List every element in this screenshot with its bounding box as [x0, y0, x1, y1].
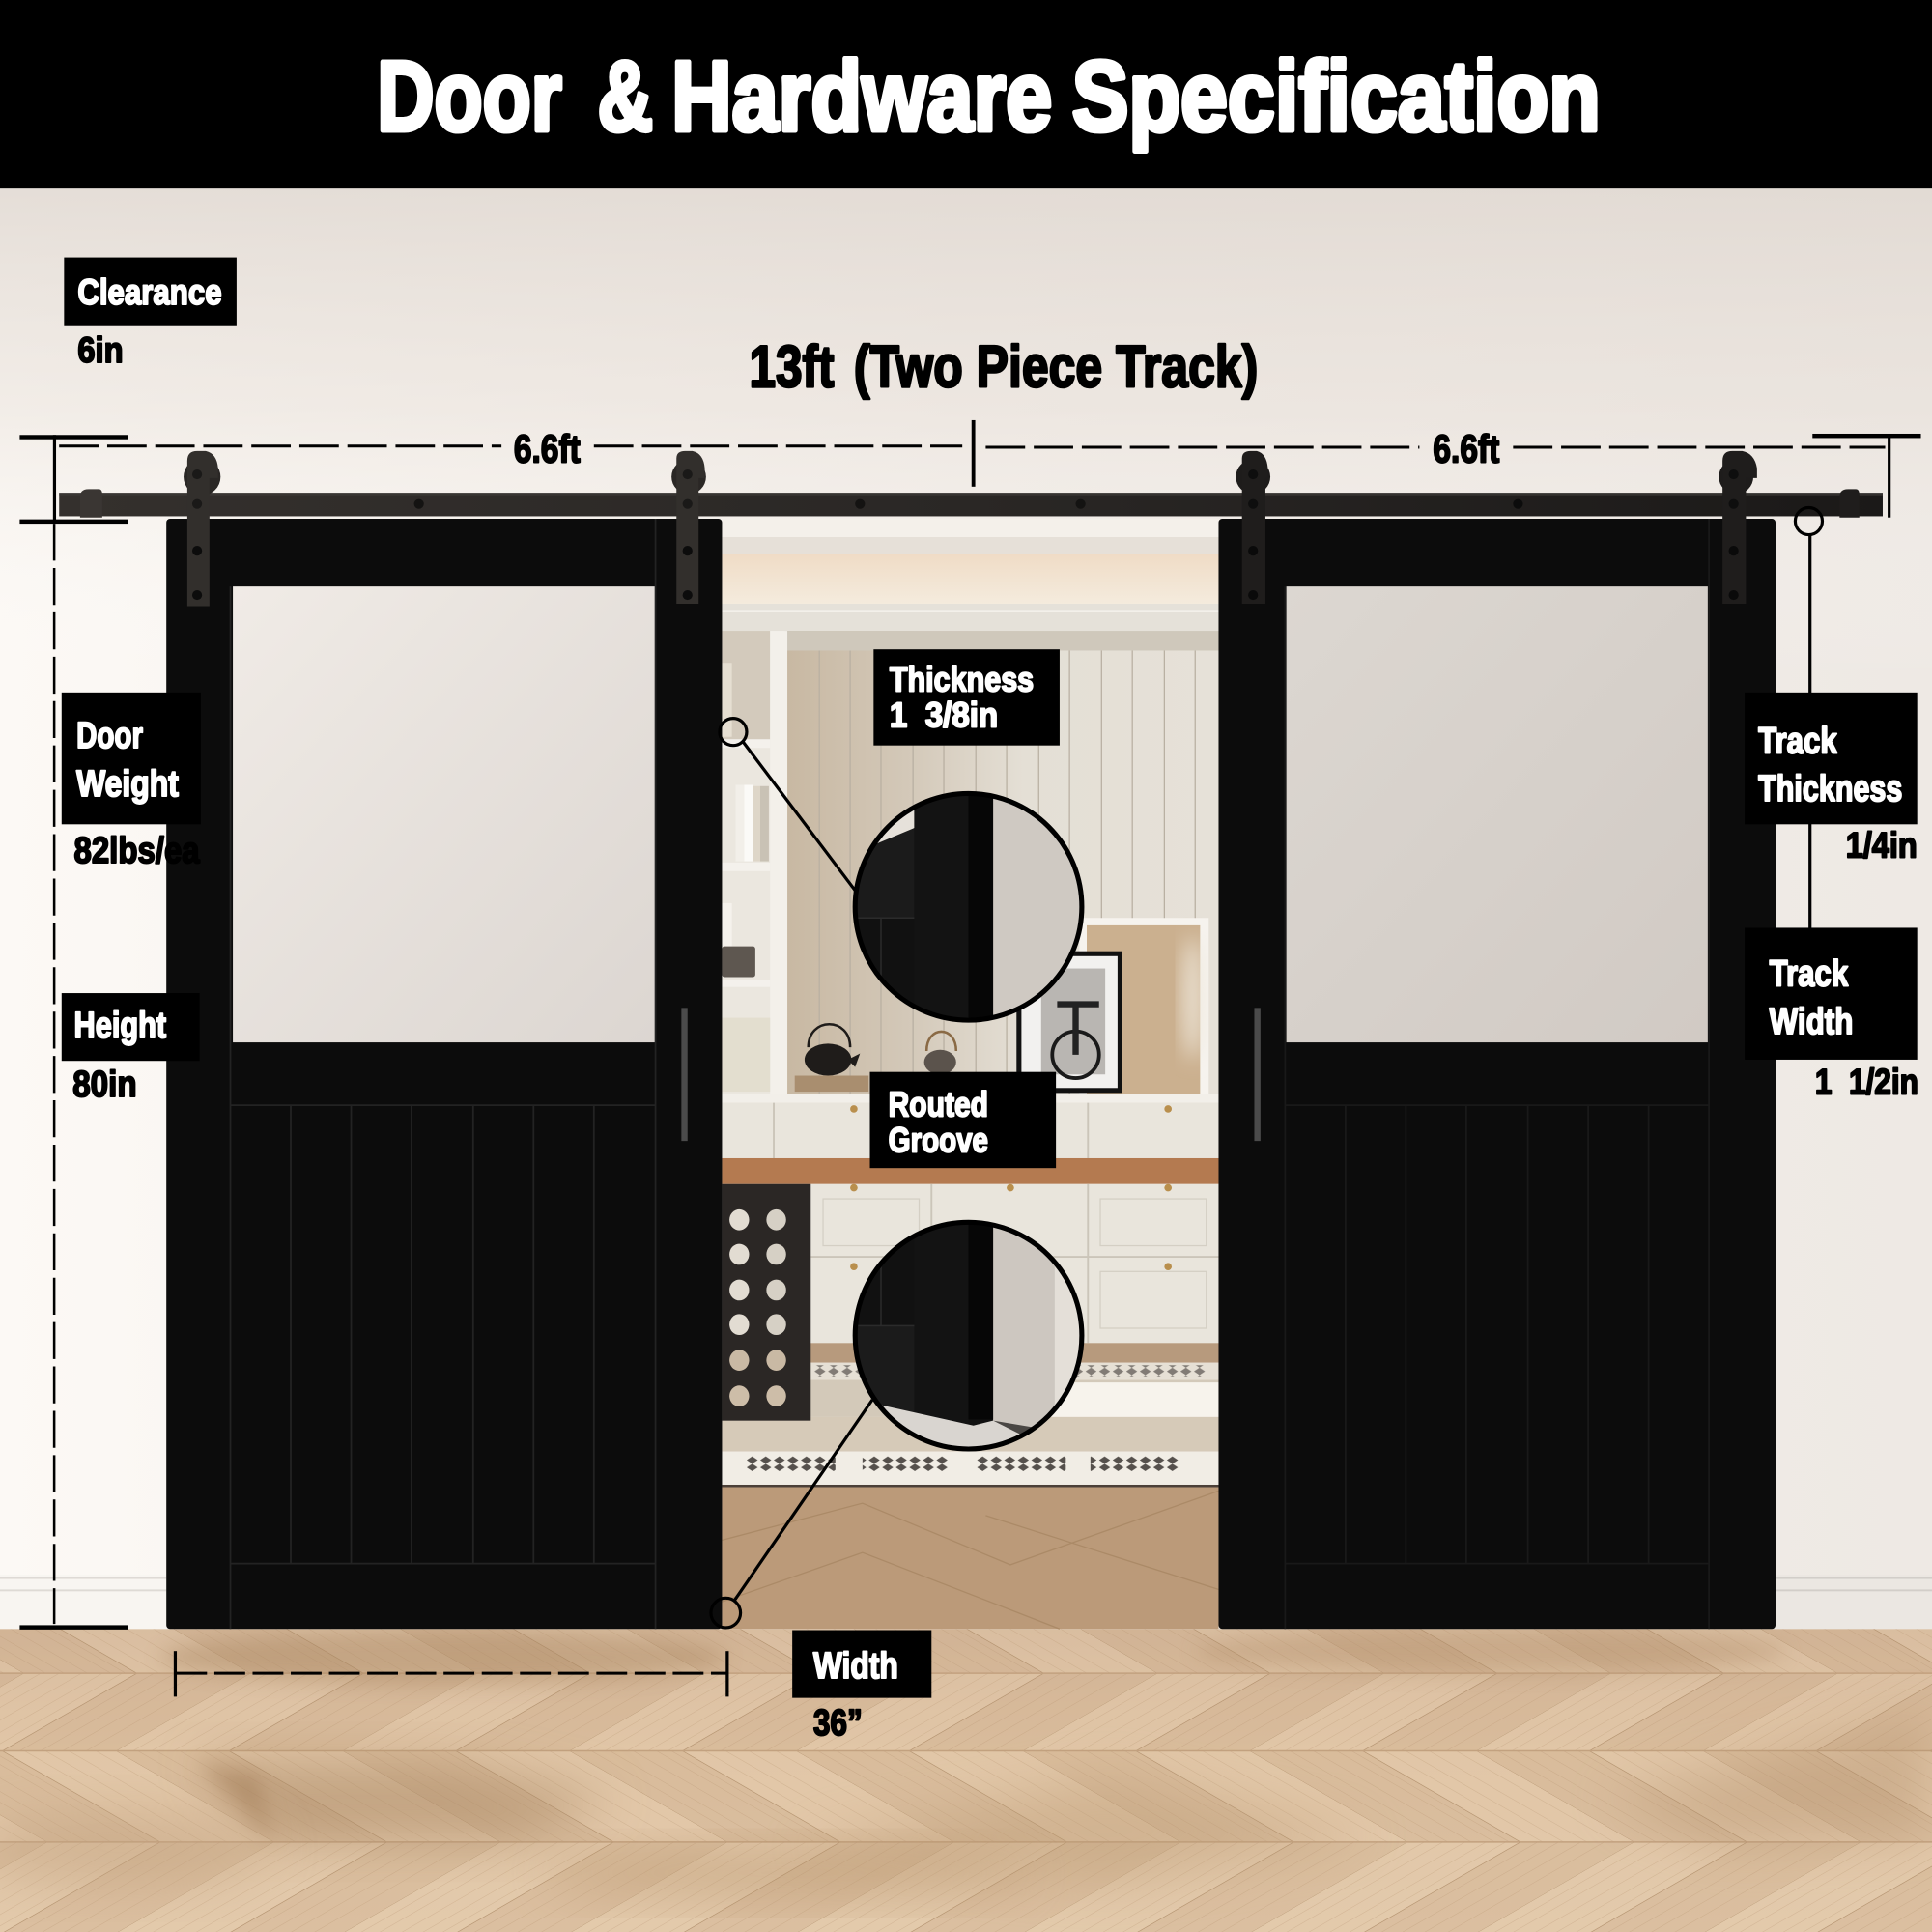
lower cabinets: [810, 1184, 1218, 1343]
label: track width: Width: [1770, 1001, 1853, 1042]
label: door weight: 82lbs/ea: [74, 830, 200, 871]
right door plank grooves: [1285, 519, 1709, 1629]
title: Door: [377, 40, 562, 152]
label: routed groove: Groove: [889, 1122, 988, 1160]
bottom magnified door detail: [855, 1222, 1082, 1454]
herringbone wood floor: [0, 1629, 1932, 1932]
label: thickness: Thickness: [890, 661, 1034, 699]
title: [377, 40, 1601, 152]
groove magnifier: [711, 1222, 1082, 1628]
teapots: [795, 1024, 956, 1092]
label: track thickness: [1745, 693, 1918, 866]
label: width: Width: [813, 1645, 898, 1687]
track dimension line: [59, 420, 1886, 487]
hanger strap 1: [184, 451, 220, 607]
label: height: [62, 993, 200, 1105]
title: &: [598, 40, 653, 152]
title: Specification: [1072, 40, 1601, 152]
wood counter: [722, 1158, 1218, 1184]
track callout leader: [1795, 508, 1822, 927]
label: door weight: [62, 693, 201, 871]
leader to bottom corner: [711, 1400, 872, 1628]
clearance bracket left: [19, 435, 128, 524]
label: thickness: 1 3/8in: [890, 696, 998, 735]
label: track width: Track: [1770, 952, 1849, 994]
right barn door: [1218, 519, 1776, 1629]
clearance bracket right: [1812, 434, 1921, 518]
room seen through the door opening: [722, 519, 1218, 1629]
label: door weight: Weight: [76, 763, 179, 805]
door width dimension line: [174, 1651, 728, 1696]
left half length: 6.6ft: [514, 426, 581, 470]
label: clearance: Clearance: [77, 272, 222, 312]
thickness magnifier: [720, 719, 1082, 1020]
label: height: Height: [74, 1005, 166, 1046]
room floor and rug: [722, 1343, 1218, 1629]
door height dimension line: [19, 524, 128, 1630]
hanger strap 4: [1719, 451, 1757, 604]
right door glass panel: [1287, 586, 1708, 1042]
track length heading: 13ft: [750, 334, 835, 400]
label: track thickness: Track: [1758, 720, 1837, 761]
bottom magnifier ring: [855, 1222, 1082, 1449]
leader to top corner: [720, 719, 856, 892]
left door glass panel: [233, 586, 656, 1042]
left door plank grooves: [231, 519, 656, 1629]
hanger strap 2: [671, 451, 706, 604]
label: height: 80in: [72, 1064, 137, 1105]
hanger strap 3: [1236, 451, 1270, 604]
label: door weight: Door: [76, 715, 143, 756]
label: routed groove: [870, 1072, 1056, 1168]
label: track width: [1745, 927, 1918, 1102]
top magnifier ring: [855, 793, 1082, 1020]
label: clearance: [64, 258, 237, 370]
baseboard left and right: [0, 1575, 1932, 1629]
label: thickness: [873, 649, 1060, 746]
left barn door: [166, 519, 722, 1629]
left shelving unit: [722, 631, 787, 1094]
header bar: [0, 0, 1932, 188]
wall background: [0, 188, 1932, 1630]
track length heading: [750, 334, 1258, 400]
perforated black panel: [722, 1184, 810, 1421]
right half length: 6.6ft: [1433, 426, 1500, 470]
track length heading: (Two Piece Track): [854, 334, 1258, 400]
sliding track rail: [59, 489, 1883, 518]
left door handle: [681, 1008, 688, 1141]
label: width: [792, 1631, 931, 1744]
ceiling and crown moulding: [722, 519, 1218, 631]
label: routed groove: Routed: [889, 1086, 988, 1124]
title: Hardware: [671, 40, 1052, 152]
label: clearance: 6in: [77, 330, 124, 370]
label: track thickness: 1/4in: [1846, 826, 1918, 866]
panelled back wall: [784, 631, 1218, 1094]
upper cabinets: [722, 1094, 1218, 1158]
art frames: [1016, 918, 1208, 1094]
top magnified door detail: [855, 793, 1082, 1020]
right door handle: [1254, 1008, 1261, 1141]
label: width: 36”: [813, 1702, 863, 1744]
